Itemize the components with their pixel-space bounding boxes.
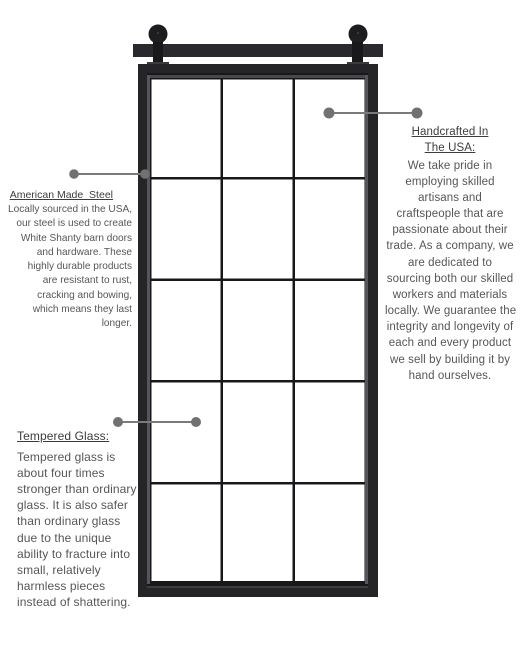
text: american made steel: are resistant to rust, xyxy=(43,275,132,286)
text: tempered glass: small, relatively xyxy=(17,563,101,577)
text: american made steel: highly durable products xyxy=(28,261,132,272)
heading: tempered glass: Tempered Glass: xyxy=(17,429,109,443)
text: tempered glass xyxy=(17,429,137,609)
text: tempered glass: due to the unique xyxy=(17,531,111,545)
text: handcrafted in the usa: we sell by building it by xyxy=(390,354,510,366)
text: american made steel: our steel is used to create xyxy=(16,218,132,229)
heading: handcrafted in the usa xyxy=(412,126,488,154)
roller straps over rail xyxy=(153,42,363,62)
text: handcrafted in the usa xyxy=(385,126,516,382)
icon: right roller wheel xyxy=(347,24,369,64)
callout marker: handcrafted xyxy=(324,108,422,118)
text: handcrafted in the usa: workers and materials xyxy=(393,289,507,301)
text: tempered glass: glass. It is also safer xyxy=(17,498,128,512)
heading: american made steel: American Made Steel xyxy=(10,189,113,201)
text: tempered glass: instead of shattering. xyxy=(17,595,131,609)
text: tempered glass: than ordinary glass xyxy=(17,514,120,528)
text: handcrafted in the usa: are dedicated to xyxy=(408,257,492,269)
door frame xyxy=(138,64,378,597)
text: handcrafted in the usa: employing skilled xyxy=(405,176,495,188)
callout marker: american steel xyxy=(69,169,150,179)
heading: handcrafted in the usa: Handcrafted In xyxy=(412,126,488,138)
text: tempered glass: ability to fracture into xyxy=(17,547,130,561)
glass panes grid xyxy=(152,80,364,581)
text: american made steel: Locally sourced in the USA, xyxy=(8,204,132,215)
text: handcrafted in the usa: hand ourselves. xyxy=(409,370,491,382)
text: tempered glass: stronger than ordinary xyxy=(17,482,137,496)
text: handcrafted in the usa: artisans and xyxy=(418,192,482,204)
text: handcrafted in the usa: locally. We guarantee the xyxy=(385,305,516,317)
text: handcrafted in the usa: passionate about their xyxy=(392,224,508,236)
text: handcrafted in the usa: integrity and longevity of xyxy=(387,321,513,333)
text: handcrafted in the usa: craftspeople that are xyxy=(397,208,503,220)
text: american made steel: which means they last xyxy=(33,304,132,315)
text: handcrafted in the usa: trade. As a company, we xyxy=(386,240,514,252)
text: handcrafted in the usa: each and every product xyxy=(389,337,511,349)
text: american made steel xyxy=(8,189,132,329)
text: tempered glass: about four times xyxy=(17,466,105,480)
text: tempered glass: harmless pieces xyxy=(17,579,105,593)
track rail xyxy=(133,44,383,57)
icon: left roller wheel xyxy=(147,24,169,64)
text: handcrafted in the usa: sourcing both our skilled xyxy=(387,273,513,285)
text: handcrafted in the usa: We take pride in xyxy=(408,160,492,172)
text: american made steel: cracking and bowing, xyxy=(37,290,132,301)
text: tempered glass: Tempered glass is xyxy=(17,450,115,464)
text: american made steel: and hardware. These xyxy=(37,247,132,258)
text: american made steel: longer. xyxy=(102,318,132,329)
text: american made steel: White Shanty barn doors xyxy=(21,233,132,244)
heading: handcrafted in the usa: The USA: xyxy=(425,142,475,154)
callout marker: tempered glass xyxy=(113,417,201,427)
